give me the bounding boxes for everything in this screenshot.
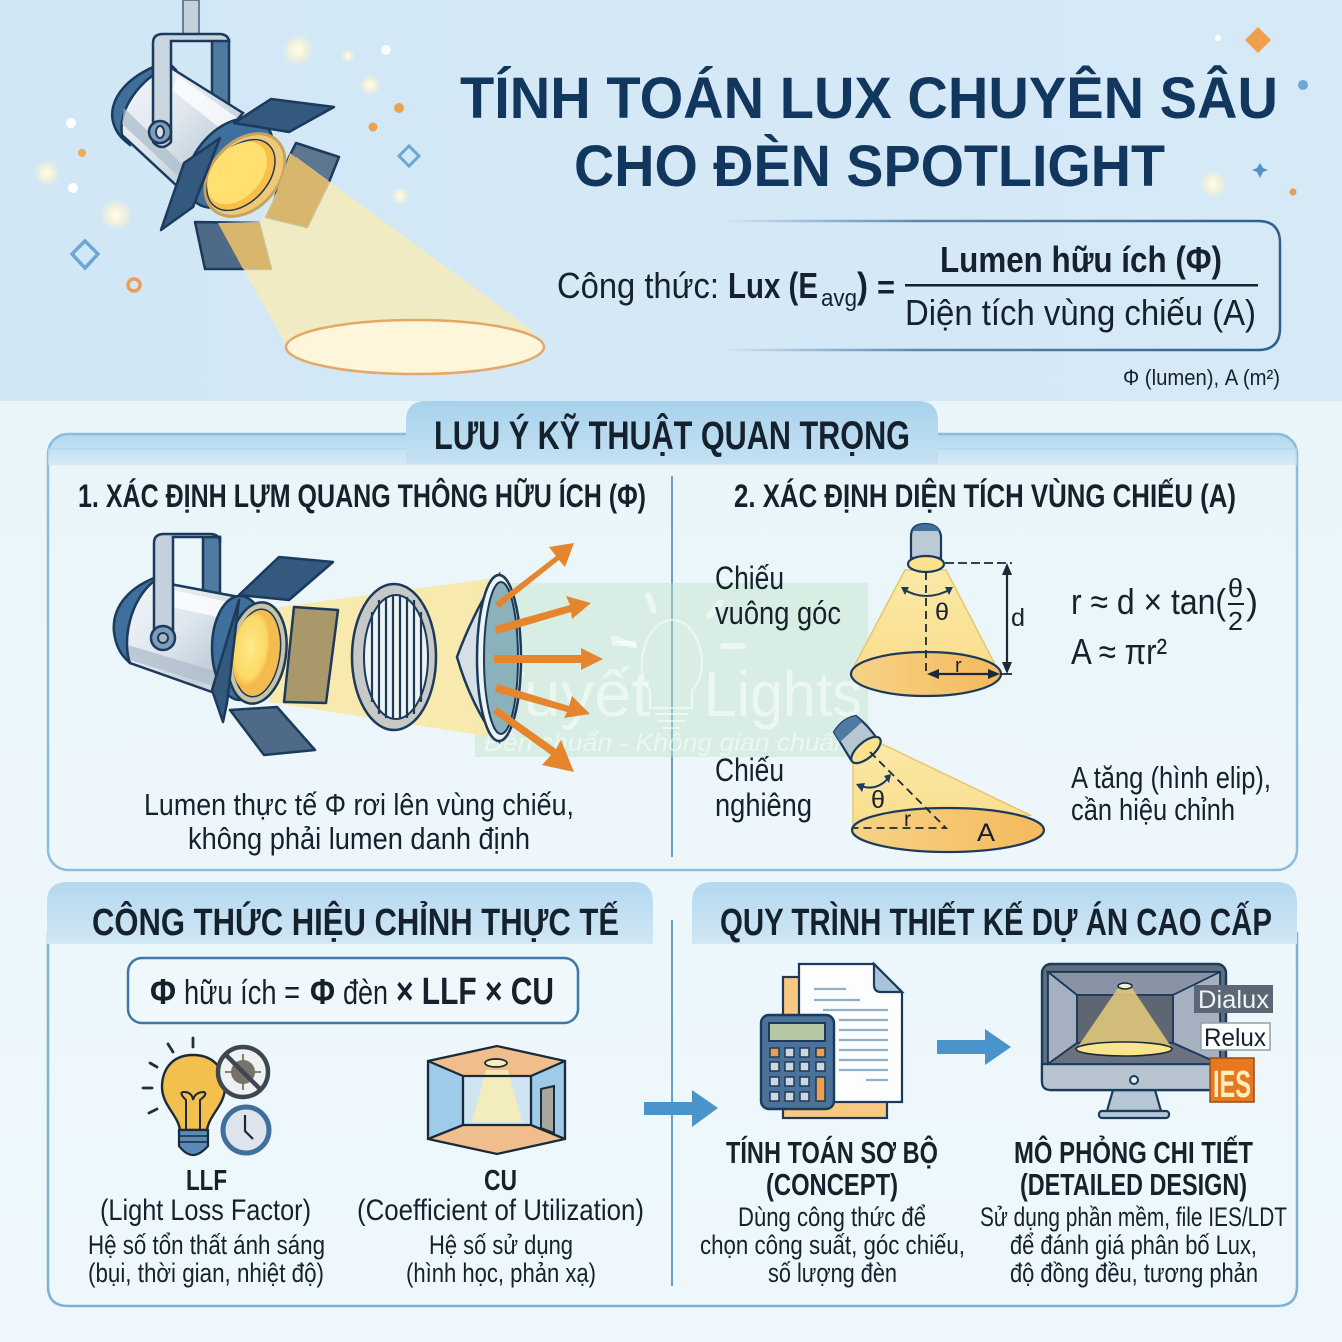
diagram: perpendicular beam: d bbox=[1011, 604, 1025, 632]
icon: exploded spotlight with optics bbox=[114, 534, 603, 772]
title: TÍNH TOÁN LUX CHUYÊN SÂU bbox=[460, 66, 1278, 131]
text: CU: CU bbox=[484, 1165, 517, 1197]
text: concept step: chọn công suất, góc chiếu, bbox=[700, 1230, 965, 1260]
note: tilted area: cần hiệu chỉnh bbox=[1071, 792, 1235, 827]
panel: lux formula: Lumen hữu ích (Φ) bbox=[940, 239, 1222, 280]
diagram: tilted beam: θ bbox=[871, 786, 885, 814]
heading: technical notes bbox=[406, 401, 938, 464]
heading: correction formula: CÔNG THỨC HIỆU CHỈNH THỰC TẾ bbox=[92, 899, 619, 944]
lower background bbox=[0, 401, 1342, 1342]
panel: lux formula: Diện tích vùng chiếu (A) bbox=[905, 292, 1256, 333]
text: concept step bbox=[700, 1134, 965, 1288]
label: tilted: Chiếu bbox=[715, 752, 784, 788]
note: tilted area bbox=[1071, 760, 1271, 827]
formula: radius and area: r ≈ d × tan( bbox=[1071, 581, 1226, 622]
text: LLF: (bụi, thời gian, nhiệt độ) bbox=[88, 1258, 324, 1288]
icon: monitor with software bbox=[1042, 964, 1273, 1118]
heading: correction formula bbox=[47, 882, 653, 944]
icon: monitor with software: Dialux bbox=[1198, 986, 1269, 1014]
formula box bbox=[128, 958, 578, 1023]
heading: section 1: 1. XÁC ĐỊNH LỰM QUANG THÔNG HỮU ÍCH (Φ) bbox=[78, 478, 646, 514]
watermark: Lights bbox=[704, 658, 862, 730]
decorative sparkles bbox=[34, 27, 1308, 291]
text: detailed design step: MÔ PHỎNG CHI TIẾT bbox=[1014, 1134, 1253, 1170]
title bbox=[460, 66, 1278, 199]
panel: lux formula: Công thức: bbox=[557, 265, 719, 306]
label: perpendicular bbox=[715, 560, 841, 631]
text: detailed design step bbox=[980, 1134, 1287, 1288]
formula: radius and area bbox=[1071, 573, 1258, 672]
formula: radius and area: θ bbox=[1228, 573, 1243, 603]
caption: lumen: không phải lumen danh định bbox=[188, 821, 530, 856]
label: perpendicular: Chiếu bbox=[715, 560, 784, 596]
formula: radius and area: 2 bbox=[1228, 606, 1243, 636]
watermark bbox=[475, 583, 868, 757]
formula units note: Φ (lumen), A (m²) bbox=[1123, 365, 1280, 390]
caption: lumen: Lumen thực tế Φ rơi lên vùng chiếu, bbox=[144, 787, 574, 822]
text: CU: Hệ số sử dụng bbox=[429, 1230, 573, 1260]
text: LLF: (Light Loss Factor) bbox=[100, 1194, 311, 1227]
panel: lux formula: Lux (E bbox=[728, 265, 818, 306]
diagram: tilted beam bbox=[834, 716, 1044, 852]
text: concept step: (CONCEPT) bbox=[766, 1167, 898, 1202]
formula box: Φ bbox=[310, 971, 335, 1012]
panel: lux formula: avg bbox=[821, 285, 857, 312]
diagram: tilted beam: r bbox=[904, 808, 911, 831]
note: tilted area: A tăng (hình elip), bbox=[1071, 760, 1271, 795]
heading: technical notes: LƯU Ý KỸ THUẬT QUAN TRỌNG bbox=[434, 412, 910, 458]
text: detailed design step: để đánh giá phân bố Lux, bbox=[1010, 1230, 1257, 1260]
panel: technical notes bbox=[48, 401, 1297, 870]
formula: radius and area: A ≈ πr² bbox=[1071, 631, 1167, 672]
watermark: Tuyết bbox=[485, 658, 650, 730]
text: concept step: Dùng công thức để bbox=[738, 1202, 926, 1232]
panel: lux formula: ) bbox=[857, 265, 868, 306]
watermark: Đèn chuẩn - Không gian chuẩn bbox=[484, 729, 849, 757]
text: concept step: TÍNH TOÁN SƠ BỘ bbox=[726, 1134, 938, 1170]
text: LLF bbox=[88, 1165, 325, 1288]
text: detailed design step: (DETAILED DESIGN) bbox=[1020, 1167, 1247, 1202]
diagram: perpendicular beam bbox=[850, 524, 1025, 696]
text: CU: (hình học, phản xạ) bbox=[406, 1258, 596, 1288]
heading: project workflow bbox=[692, 882, 1297, 944]
formula box: Φ bbox=[150, 971, 176, 1012]
text: CU bbox=[357, 1165, 644, 1288]
icon: CU room bbox=[428, 1046, 565, 1154]
icon: monitor with software: IES bbox=[1213, 1064, 1251, 1106]
text: concept step: số lượng đèn bbox=[768, 1258, 897, 1288]
panel: lux formula: = bbox=[877, 269, 895, 305]
icon: calculator and documents bbox=[761, 964, 902, 1118]
text: CU: (Coefficient of Utilization) bbox=[357, 1194, 644, 1227]
panel: lux formula bbox=[557, 221, 1280, 350]
caption: lumen bbox=[144, 787, 574, 856]
formula: radius and area: ) bbox=[1246, 581, 1258, 622]
diagram: tilted beam: A bbox=[977, 819, 995, 847]
text: LLF: Hệ số tổn thất ánh sáng bbox=[88, 1230, 325, 1260]
header background bbox=[0, 0, 1342, 401]
panel: correction and workflow bbox=[47, 882, 1297, 1306]
formula box: × LLF × CU bbox=[396, 971, 554, 1013]
icon: monitor with software: Relux bbox=[1204, 1024, 1266, 1052]
arrow: to workflow bbox=[644, 1090, 718, 1127]
text: detailed design step: độ đồng đều, tương phản bbox=[1010, 1258, 1258, 1288]
label: perpendicular: vuông góc bbox=[715, 595, 841, 631]
text: LLF: LLF bbox=[186, 1165, 227, 1197]
diagram: perpendicular beam: r bbox=[955, 655, 962, 677]
arrow: concept to detailed bbox=[937, 1029, 1011, 1065]
label: tilted: nghiêng bbox=[715, 787, 812, 823]
icon: LLF bulb, dust, clock bbox=[143, 1038, 269, 1155]
formula box: hữu ích = bbox=[184, 974, 300, 1012]
title: CHO ĐÈN SPOTLIGHT bbox=[574, 134, 1165, 199]
formula box: đèn bbox=[343, 974, 388, 1012]
heading: section 2: 2. XÁC ĐỊNH DIỆN TÍCH VÙNG CHIẾU (A) bbox=[734, 478, 1236, 514]
diagram: perpendicular beam: θ bbox=[935, 599, 949, 626]
label: tilted bbox=[715, 752, 812, 823]
icon: spotlight with beam bbox=[112, 0, 544, 374]
